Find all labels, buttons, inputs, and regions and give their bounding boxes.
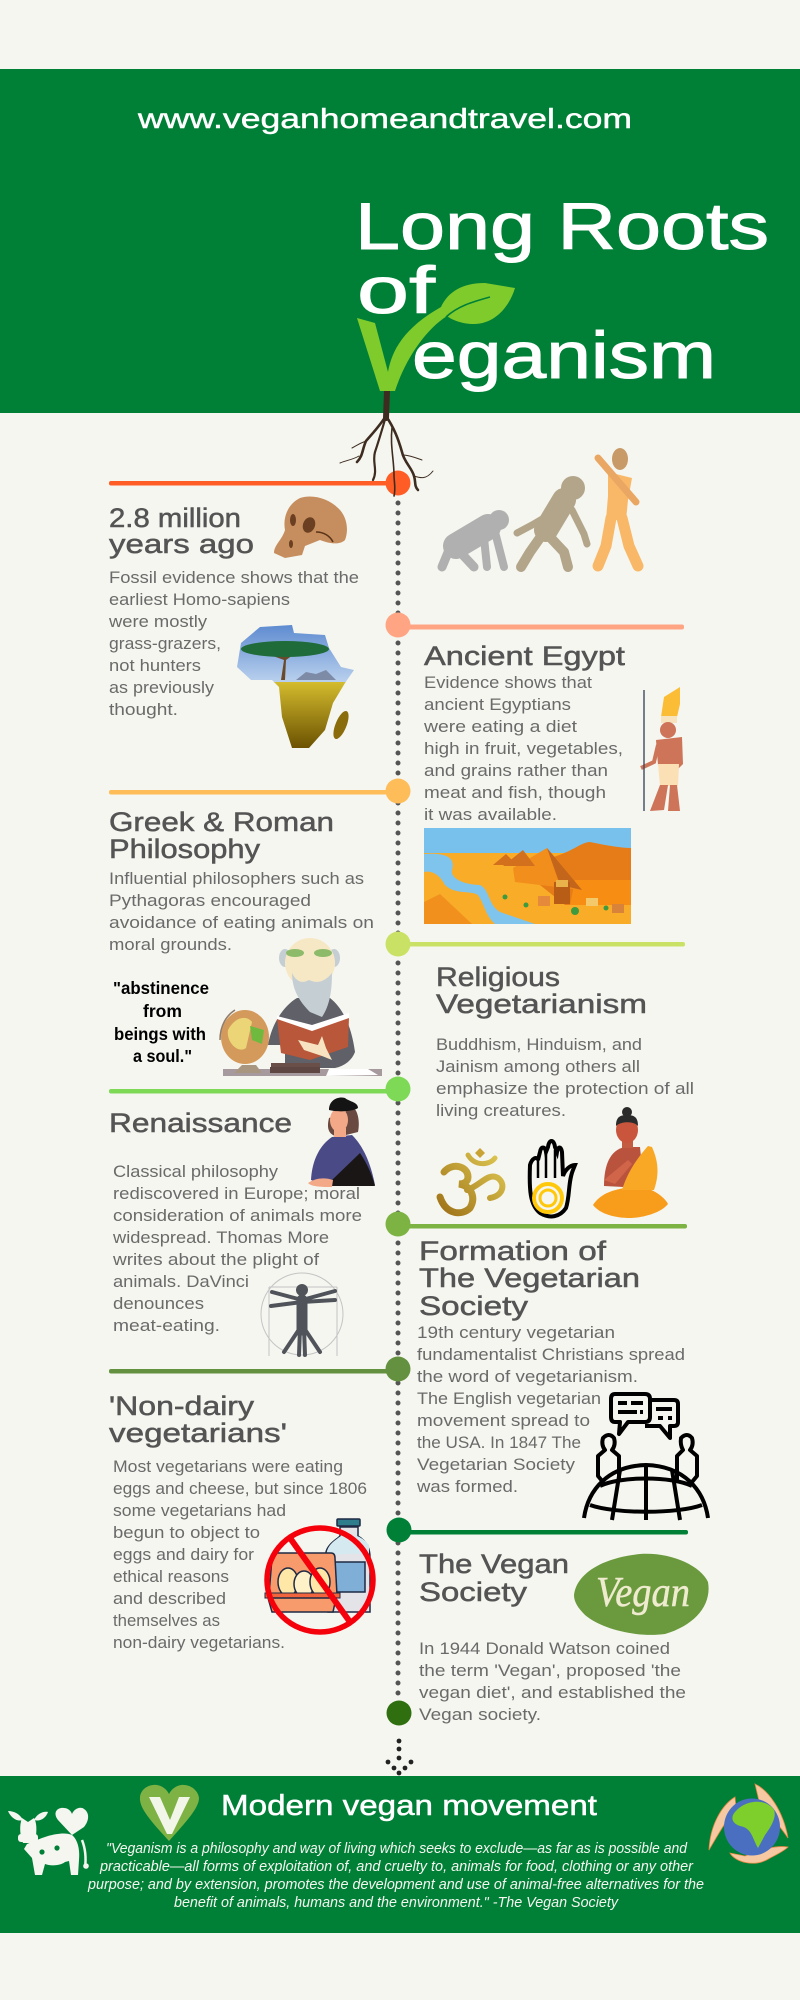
body text: non-dairy vegetarians. bbox=[113, 1633, 285, 1652]
heading bbox=[419, 1549, 569, 1607]
heading: Society bbox=[419, 1291, 529, 1321]
body text: Vegetarian Society bbox=[417, 1455, 576, 1474]
icon: jain hand bbox=[530, 1141, 575, 1216]
body text: begun to object to bbox=[113, 1523, 260, 1542]
body text: Evidence shows that bbox=[424, 673, 592, 692]
body text: ethical reasons bbox=[113, 1567, 229, 1586]
body text: Classical philosophy bbox=[113, 1162, 279, 1181]
heading: Vegetarianism bbox=[436, 989, 647, 1019]
body text: thought. bbox=[109, 700, 178, 719]
heading: vegetarians' bbox=[109, 1418, 287, 1448]
body text: Buddhism, Hinduism, and bbox=[436, 1035, 642, 1054]
icon: vegan stamp: Vegan bbox=[596, 1570, 690, 1616]
body text: not hunters bbox=[109, 656, 201, 675]
icon: crossed-out eggs and milk bbox=[265, 1519, 373, 1632]
icon: roots bbox=[340, 391, 433, 496]
heading: Philosophy bbox=[109, 834, 261, 864]
body text: writes about the plight of bbox=[112, 1250, 319, 1269]
panel: Religious Vegetarianism bbox=[436, 962, 694, 1218]
icon: pharaoh bbox=[641, 687, 683, 811]
icon: end of timeline dots bbox=[386, 1739, 413, 1775]
title: of bbox=[357, 253, 436, 327]
body text: consideration of animals more bbox=[113, 1206, 362, 1225]
body text bbox=[112, 1162, 362, 1335]
icon: seated buddha bbox=[593, 1107, 668, 1218]
body text: Vegan society. bbox=[419, 1705, 541, 1724]
heading: 2.8 million bbox=[109, 503, 241, 533]
body text bbox=[423, 673, 623, 824]
heading: years ago bbox=[109, 529, 254, 559]
footer quote: "Veganism is a philosophy and way of living which seeks to exclude—as far as is possible and bbox=[106, 1841, 688, 1857]
icon: human evolution figures bbox=[442, 448, 638, 567]
body text: movement spread to bbox=[417, 1411, 590, 1430]
panel: Formation of The Vegetarian Society bbox=[416, 1236, 708, 1520]
heading bbox=[109, 807, 334, 864]
body text: meat-eating. bbox=[113, 1316, 220, 1335]
body text: living creatures. bbox=[436, 1101, 566, 1120]
footer heading: Modern vegan movement bbox=[221, 1790, 597, 1822]
body text: eggs and cheese, but since 1806 bbox=[113, 1479, 367, 1498]
footer quote: benefit of animals, humans and the environment." -The Vegan Society bbox=[174, 1895, 619, 1911]
icon: people around globe with speech bubbles bbox=[584, 1394, 708, 1520]
body text bbox=[108, 568, 359, 719]
body text: Pythagoras encouraged bbox=[109, 891, 311, 910]
body text: were eating a diet bbox=[423, 717, 577, 736]
heading: The Vegan bbox=[419, 1549, 569, 1579]
body text: Jainism among others all bbox=[436, 1057, 640, 1076]
body text: were mostly bbox=[108, 612, 208, 631]
image: egypt desert scene bbox=[424, 828, 631, 924]
body text: Most vegetarians were eating bbox=[113, 1457, 343, 1476]
body text: Fossil evidence shows that the bbox=[109, 568, 359, 587]
body text: avoidance of eating animals on bbox=[109, 913, 374, 932]
icon: vegan stamp bbox=[574, 1554, 709, 1635]
body text: and described bbox=[113, 1589, 226, 1608]
icon: vegan leaf V bbox=[357, 283, 515, 391]
body text bbox=[109, 869, 374, 954]
panel: The Vegan Society bbox=[419, 1549, 709, 1724]
quote: from bbox=[143, 1001, 182, 1021]
footer quote: practicable—all forms of exploitation of, and cruelty to, animals for food, clothing or any other bbox=[99, 1859, 694, 1875]
body text: Influential philosophers such as bbox=[109, 869, 364, 888]
icon: renaissance man portrait bbox=[308, 1098, 375, 1187]
quote bbox=[113, 978, 209, 1066]
heading: The Vegetarian bbox=[419, 1263, 640, 1293]
body text: grass-grazers, bbox=[109, 634, 221, 653]
body text: it was available. bbox=[424, 805, 557, 824]
body text: 19th century vegetarian bbox=[417, 1323, 615, 1342]
heading: Ancient Egypt bbox=[424, 641, 626, 671]
body text bbox=[419, 1639, 686, 1724]
body text: rediscovered in Europe; moral bbox=[113, 1184, 360, 1203]
icon: africa map bbox=[237, 625, 355, 749]
body text: as previously bbox=[109, 678, 215, 697]
icon: vitruvian man bbox=[261, 1273, 343, 1356]
icon: cow with heart bbox=[8, 1808, 89, 1875]
body text: the term 'Vegan', proposed 'the bbox=[419, 1661, 681, 1680]
icon: philosopher with globe and book bbox=[220, 938, 382, 1076]
quote: "abstinence bbox=[113, 978, 209, 998]
body text: emphasize the protection of all bbox=[436, 1079, 694, 1098]
body text: was formed. bbox=[416, 1477, 518, 1496]
icon: om symbol bbox=[440, 1148, 502, 1213]
body text: meat and fish, though bbox=[424, 783, 606, 802]
heading: Religious bbox=[436, 962, 560, 992]
icon: skull bbox=[274, 496, 347, 558]
body text: In 1944 Donald Watson coined bbox=[419, 1639, 670, 1658]
heading: Greek & Roman bbox=[109, 807, 334, 837]
body text bbox=[416, 1323, 685, 1496]
footer quote bbox=[87, 1841, 704, 1911]
footer band bbox=[0, 1776, 800, 1933]
heading bbox=[109, 1391, 287, 1448]
panel: Non-dairy vegetarians bbox=[109, 1391, 373, 1652]
body text: the USA. In 1847 The bbox=[417, 1433, 581, 1452]
icon: earth in hands bbox=[709, 1784, 788, 1863]
body text: and grains rather than bbox=[424, 761, 608, 780]
panel: Renaissance bbox=[109, 1098, 375, 1356]
heading: Renaissance bbox=[109, 1108, 292, 1138]
icon: madagascar bbox=[330, 709, 352, 741]
heading bbox=[109, 503, 254, 559]
timeline dotted line bbox=[396, 503, 400, 1703]
heading: Society bbox=[419, 1577, 528, 1607]
timeline node lines and circles bbox=[109, 470, 688, 1726]
body text: vegan diet', and established the bbox=[419, 1683, 686, 1702]
body text: ancient Egyptians bbox=[424, 695, 571, 714]
heading bbox=[419, 1236, 640, 1321]
body text: eggs and dairy for bbox=[113, 1545, 254, 1564]
body text: denounces bbox=[113, 1294, 204, 1313]
body text: widespread. Thomas More bbox=[112, 1228, 329, 1247]
header band bbox=[0, 69, 800, 413]
body text: high in fruit, vegetables, bbox=[424, 739, 623, 758]
panel: 2.8 million years ago bbox=[108, 448, 638, 749]
heading: Formation of bbox=[419, 1236, 607, 1266]
body text: moral grounds. bbox=[109, 935, 232, 954]
body text: The English vegetarian bbox=[417, 1389, 601, 1408]
body text: themselves as bbox=[113, 1611, 220, 1630]
quote: beings with bbox=[114, 1024, 206, 1044]
panel: Greek & Roman Philosophy bbox=[109, 807, 382, 1076]
panel: Ancient Egypt bbox=[423, 641, 683, 924]
title: eganism bbox=[412, 318, 716, 392]
title bbox=[355, 189, 769, 392]
body text: earliest Homo-sapiens bbox=[109, 590, 290, 609]
body text: fundamentalist Christians spread bbox=[417, 1345, 685, 1364]
heading bbox=[436, 962, 647, 1019]
body text bbox=[113, 1457, 367, 1652]
body text bbox=[436, 1035, 694, 1120]
body text: some vegetarians had bbox=[113, 1501, 286, 1520]
body text: the word of vegetarianism. bbox=[417, 1367, 638, 1386]
quote: a soul." bbox=[133, 1046, 192, 1066]
footer quote: purpose; and by extension, promotes the development and use of animal-free alternatives for the bbox=[87, 1877, 704, 1893]
title: Long Roots bbox=[355, 189, 769, 263]
website url: www.veganhomeandtravel.com bbox=[137, 103, 632, 134]
body text: animals. DaVinci bbox=[113, 1272, 249, 1291]
heading: 'Non-dairy bbox=[109, 1391, 255, 1421]
icon: V heart bbox=[140, 1785, 199, 1841]
